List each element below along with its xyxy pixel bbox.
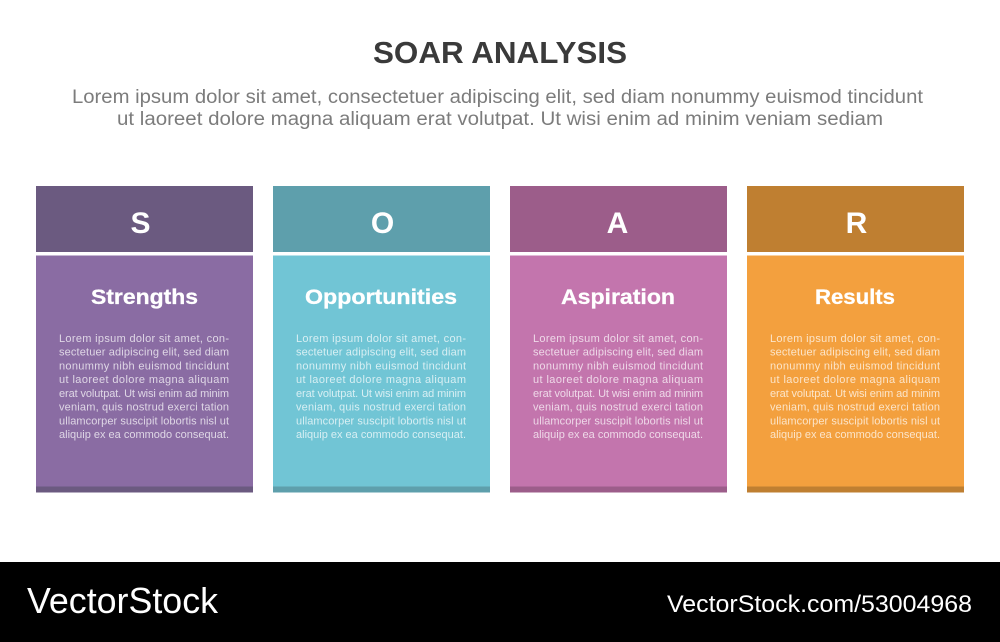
- body text: ullamcorper suscipit lobortis nisl ut: [59, 416, 229, 428]
- footer logo: VectorStock: [27, 580, 219, 621]
- subtitle: ut laoreet dolore magna aliquam erat volutpat. Ut wisi enim ad minim veniam sediam: [117, 109, 883, 130]
- heading: Results: Results: [815, 286, 895, 309]
- body text: Lorem ipsum dolor sit amet, con-: [296, 333, 466, 345]
- subtitle: [72, 87, 924, 130]
- body text: erat volutpat. Ut wisi enim ad minim: [770, 388, 940, 400]
- heading: Strengths: Strengths: [91, 286, 198, 309]
- body text: veniam, quis nostrud exerci tation: [770, 402, 940, 414]
- card body: aspiration: [510, 256, 727, 492]
- body text: ut laoreet dolore magna aliquam: [533, 374, 703, 386]
- panel: opportunities: [273, 186, 490, 492]
- body text: nonummy nibh euismod tincidunt: [59, 360, 229, 372]
- subtitle: Lorem ipsum dolor sit amet, consectetuer adipiscing elit, sed diam nonummy euismod tincidunt: [72, 87, 924, 108]
- heading: Opportunities: Opportunities: [305, 286, 457, 309]
- body text: nonummy nibh euismod tincidunt: [533, 360, 703, 372]
- header: S: S: [130, 207, 151, 240]
- body text: nonummy nibh euismod tincidunt: [770, 360, 940, 372]
- body text: sectetuer adipiscing elit, sed diam: [533, 347, 703, 359]
- body text: veniam, quis nostrud exerci tation: [296, 402, 466, 414]
- body text: [296, 333, 466, 441]
- bottom strip: [36, 486, 253, 492]
- body text: [59, 333, 229, 441]
- body text: veniam, quis nostrud exerci tation: [59, 402, 229, 414]
- body text: ullamcorper suscipit lobortis nisl ut: [296, 416, 466, 428]
- panel: aspiration: [510, 186, 727, 492]
- title: SOAR ANALYSIS: [373, 35, 627, 70]
- body text: [533, 333, 703, 441]
- body text: ut laoreet dolore magna aliquam: [770, 374, 940, 386]
- header: A: A: [607, 207, 628, 240]
- body text: ut laoreet dolore magna aliquam: [296, 374, 466, 386]
- header: O: O: [371, 207, 394, 240]
- body text: sectetuer adipiscing elit, sed diam: [770, 347, 940, 359]
- body text: aliquip ex ea commodo consequat.: [59, 429, 229, 441]
- card body: strengths: [36, 256, 253, 492]
- footer url: VectorStock.com/53004968: [667, 591, 972, 618]
- header: S: [36, 186, 253, 252]
- card body: opportunities: [273, 256, 490, 492]
- body text: ullamcorper suscipit lobortis nisl ut: [770, 416, 940, 428]
- body text: Lorem ipsum dolor sit amet, con-: [59, 333, 229, 345]
- card body: results: [747, 256, 964, 492]
- body text: [770, 333, 940, 441]
- body text: sectetuer adipiscing elit, sed diam: [296, 347, 466, 359]
- body text: ullamcorper suscipit lobortis nisl ut: [533, 416, 703, 428]
- bottom strip: [747, 486, 964, 492]
- body text: Lorem ipsum dolor sit amet, con-: [770, 333, 940, 345]
- bottom strip: [273, 486, 490, 492]
- heading: Aspiration: Aspiration: [561, 286, 675, 309]
- panel: strengths: [36, 186, 253, 492]
- body text: aliquip ex ea commodo consequat.: [770, 429, 940, 441]
- header: O: [273, 186, 490, 252]
- footer bar: [0, 562, 1000, 642]
- body text: nonummy nibh euismod tincidunt: [296, 360, 466, 372]
- body text: ut laoreet dolore magna aliquam: [59, 374, 229, 386]
- body text: erat volutpat. Ut wisi enim ad minim: [533, 388, 703, 400]
- body text: erat volutpat. Ut wisi enim ad minim: [59, 388, 229, 400]
- panel: results: [747, 186, 964, 492]
- body text: veniam, quis nostrud exerci tation: [533, 402, 703, 414]
- body text: sectetuer adipiscing elit, sed diam: [59, 347, 229, 359]
- header: A: [510, 186, 727, 252]
- body text: aliquip ex ea commodo consequat.: [296, 429, 466, 441]
- body text: Lorem ipsum dolor sit amet, con-: [533, 333, 703, 345]
- header: R: [747, 186, 964, 252]
- header: R: R: [846, 207, 868, 240]
- bottom strip: [510, 486, 727, 492]
- body text: aliquip ex ea commodo consequat.: [533, 429, 703, 441]
- body text: erat volutpat. Ut wisi enim ad minim: [296, 388, 466, 400]
